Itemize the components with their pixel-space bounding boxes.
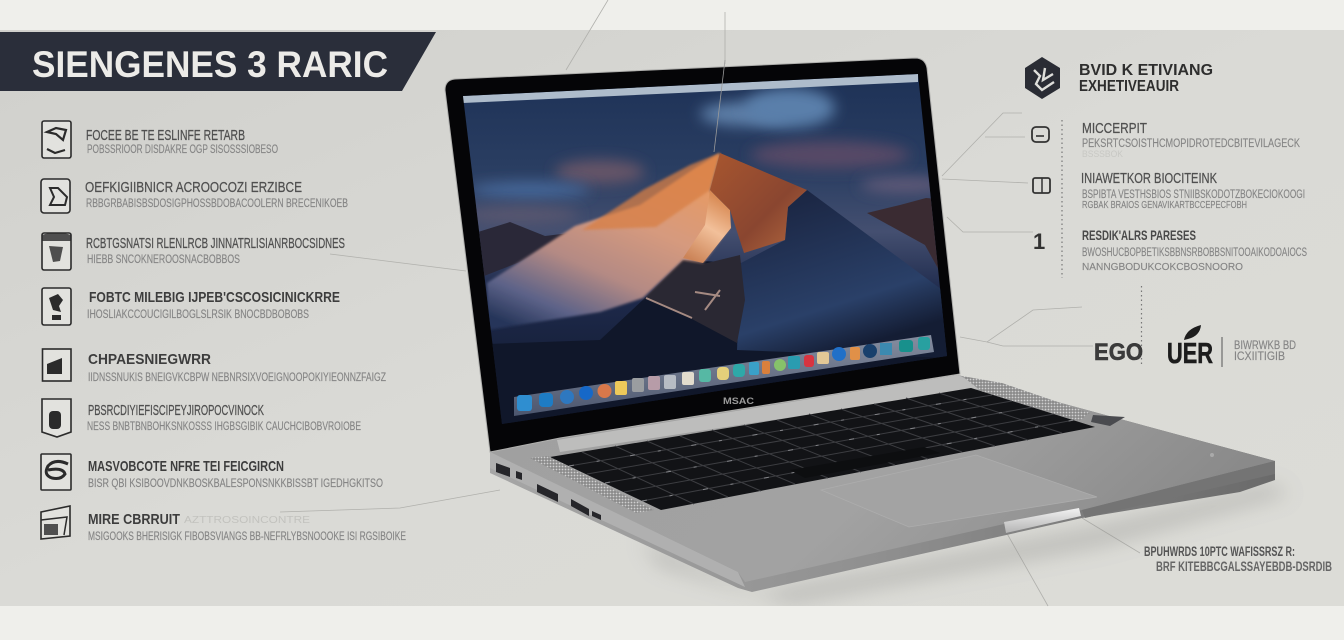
screen wallpaper xyxy=(450,70,960,430)
right heading: BVID K ETIVIANG xyxy=(1079,62,1213,79)
panel: left feature list xyxy=(41,121,406,543)
speaker grilles xyxy=(530,456,654,513)
feature row 4: IHOSLIAKCCOUCIGILBOGLSLRSIK BNOCBDBOBOBS xyxy=(87,309,309,321)
connector lines xyxy=(280,0,1140,606)
feature row 8: AZTTROSOINCONTRE xyxy=(184,515,310,526)
text block: third spec: NANNGBODUKCOKCBOSNOORO xyxy=(1082,261,1243,273)
side ports xyxy=(496,463,601,520)
text block: second spec: INIAWETKOR BIOCITEINK xyxy=(1081,170,1217,187)
feature row 7: BISR QBI KSIBOOVDNKBOSKBALESPONSNKKBISSBT IGEDHGKITSO xyxy=(88,478,383,490)
feature row 8: MIRE CBRRUIT xyxy=(88,511,180,528)
logo caption xyxy=(1222,337,1296,367)
feature row 5: IIDNSSNUKIS BNEIGVKCBPW NEBNRSIXVOEIGNOOPOKIYIEONNZFAIGZ xyxy=(88,372,386,384)
title banner: SIENGENES 3 RARIC xyxy=(32,44,388,85)
status light xyxy=(1210,453,1214,457)
dotted divider lower xyxy=(1140,286,1142,365)
text block: first spec: BSSSBOK xyxy=(1082,149,1123,159)
feature row 4 xyxy=(42,288,340,325)
feature row 4: FOBTC MILEBIG IJPEB'CSCOSICINICKRRE xyxy=(89,289,340,306)
feature row 1: POBSSRIOOR DISDAKRE OGP SISOSSSIOBESO xyxy=(87,144,278,156)
feature row 2 xyxy=(41,179,348,213)
title banner xyxy=(0,32,436,91)
sunlit ridge xyxy=(582,153,720,230)
feature row 1: FOCEE BE TE ESLINFE RETARB xyxy=(86,127,245,144)
keyboard xyxy=(550,388,1095,510)
latch xyxy=(1004,508,1081,533)
mountain foreground xyxy=(492,260,934,392)
hinge xyxy=(557,375,985,452)
snow slope xyxy=(487,153,730,330)
laptop shadow xyxy=(640,484,1290,604)
text block: second spec xyxy=(1081,170,1305,211)
right heading: EXHETIVEAUIR xyxy=(1079,78,1179,95)
text block: first spec xyxy=(1082,120,1300,159)
text block: third spec xyxy=(1082,227,1307,273)
feature row 7 xyxy=(41,454,383,490)
icon: book xyxy=(1033,178,1050,193)
logo caption: ICXIITIGIB xyxy=(1234,351,1285,363)
dotted divider xyxy=(1061,120,1063,278)
brand mark: MSAC xyxy=(723,396,755,406)
laptop xyxy=(445,58,1290,604)
text block: second spec: RGBAK BRAIOS GENAVIKARTBCCEPECFOBH xyxy=(1082,200,1247,211)
menu bar xyxy=(463,74,918,103)
logo: leaf brand xyxy=(1167,325,1213,370)
right heading xyxy=(1079,62,1213,95)
space bar xyxy=(790,447,940,478)
text block: first spec: MICCERPIT xyxy=(1082,120,1147,137)
feature row 8 xyxy=(41,506,406,543)
feature row 8: MSIGOOKS BHERISIGK FIBOBSVIANGS BB-NEFRLYBSNOOOKE ISI RGSIBOIKE xyxy=(88,531,406,543)
feature row 6 xyxy=(42,399,361,437)
mountain shadow side xyxy=(737,190,950,358)
feature row 6: PBSRCDIYIEFISCIPEYJIROPOCVINOCK xyxy=(88,402,264,419)
feature row 7: MASVOBCOTE NFRE TEI FEICGIRCN xyxy=(88,458,284,475)
rust face xyxy=(710,153,807,253)
icon: number one: 1 xyxy=(1033,229,1045,254)
feature row 2: RBBGRBABISBSDOSIGPHOSSBDOBACOOLERN BRECENIKOEB xyxy=(86,198,348,210)
feature row 5: CHPAESNIEGWRR xyxy=(88,351,211,368)
feature row 3: HIEBB SNCOKNEROOSNACBOBBOS xyxy=(87,254,240,266)
feature row 6: NESS BNBTBNBOHKSNKOSSS IHGBSGIBIK CAUCHCIBOBVROIOBE xyxy=(87,421,361,433)
feature row 3: RCBTGSNATSI RLENLRCB JINNATRLISIANRBOCSIDNES xyxy=(86,235,345,252)
bottom right callout xyxy=(1144,544,1332,574)
trackpad xyxy=(821,455,1097,527)
antenna line over screen xyxy=(714,60,725,152)
dock xyxy=(514,335,934,416)
distant peaks xyxy=(479,222,565,276)
feature row 2: OEFKIGIIBNICR ACROOCOZI ERZIBCE xyxy=(85,179,302,196)
text block: third spec: RESDIK'ALRS PARESES xyxy=(1082,227,1196,243)
panel: right features xyxy=(1025,57,1332,574)
icon: hexagon badge xyxy=(1025,57,1060,99)
feature row 1 xyxy=(42,121,278,158)
icon: device xyxy=(1032,127,1049,142)
rocky face xyxy=(646,255,745,343)
feature row 5 xyxy=(42,349,386,384)
clouds xyxy=(460,88,950,224)
logo caption: BIWRWKB BD xyxy=(1234,340,1296,352)
logo: EGO: EGO xyxy=(1094,339,1143,366)
laptop base xyxy=(490,375,1275,592)
feature row 3 xyxy=(42,232,345,270)
power key xyxy=(1091,415,1125,426)
logo: leaf brand: UER xyxy=(1167,338,1213,370)
laptop lid xyxy=(445,58,960,452)
